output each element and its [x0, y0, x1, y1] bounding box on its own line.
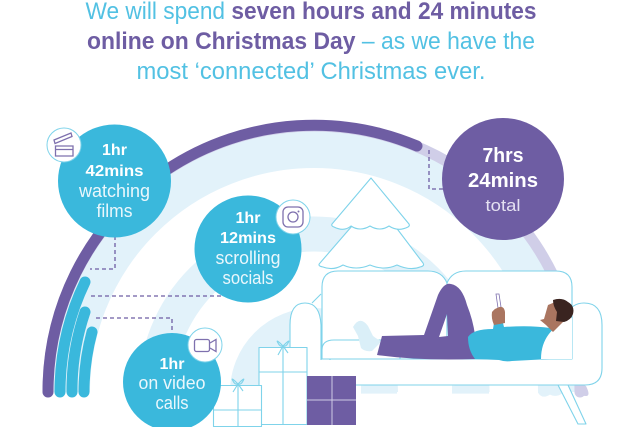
sock: [353, 321, 382, 351]
face: [540, 300, 565, 332]
gifts: [213, 341, 356, 427]
stat: watching films: 42mins: [86, 163, 144, 180]
trousers: [377, 284, 476, 360]
christmas tree: [312, 178, 424, 303]
gift: tall white: [259, 341, 307, 424]
icon: video camera: [188, 328, 222, 362]
dashed connectors: [90, 150, 444, 335]
heading: most ‘connected’ Christmas ever.: [136, 58, 486, 85]
pillow: [541, 318, 572, 359]
stat: total: 7hrs: [482, 145, 524, 167]
stat: scrolling socials: 1hr: [236, 210, 260, 227]
stat: video calls: 1hr: [160, 356, 184, 373]
stat: total: 24mins: [468, 170, 538, 192]
heading: [86, 0, 536, 85]
chart: remaining arc: [84, 332, 92, 392]
icon: clapperboard: [47, 128, 81, 162]
stat: scrolling socials: socials: [222, 268, 274, 288]
hair: [553, 299, 573, 322]
hand and phone: [496, 294, 501, 308]
heading: online on Christmas Day – as we have the: [87, 28, 535, 55]
person lying on sofa: [353, 284, 573, 361]
chart: socials arc: [60, 282, 85, 392]
chart: films arc: [48, 125, 417, 392]
sofa: [290, 271, 602, 424]
chart: total time arc: [48, 126, 580, 392]
stat: video calls: calls: [156, 393, 188, 413]
stat: watching films: watching: [78, 181, 150, 201]
background rainbow bands: [71, 149, 557, 392]
icon: instagram: [276, 200, 310, 234]
stat: scrolling socials: scrolling: [216, 248, 280, 268]
gift: small white: [213, 379, 262, 427]
stat: video calls: [123, 333, 221, 427]
jumper: [468, 323, 563, 361]
stat: video calls: on video: [138, 373, 206, 393]
stat: watching films: [58, 124, 171, 238]
stat: watching films: films: [96, 201, 132, 221]
gift: purple: [307, 376, 356, 425]
chart: video calls arc: [72, 312, 85, 392]
stat: scrolling socials: 12mins: [220, 230, 276, 247]
stat: watching films: 1hr: [102, 142, 127, 159]
stat: total: [442, 118, 564, 240]
stat: total: total: [486, 196, 520, 215]
stat: scrolling socials: [194, 196, 302, 302]
